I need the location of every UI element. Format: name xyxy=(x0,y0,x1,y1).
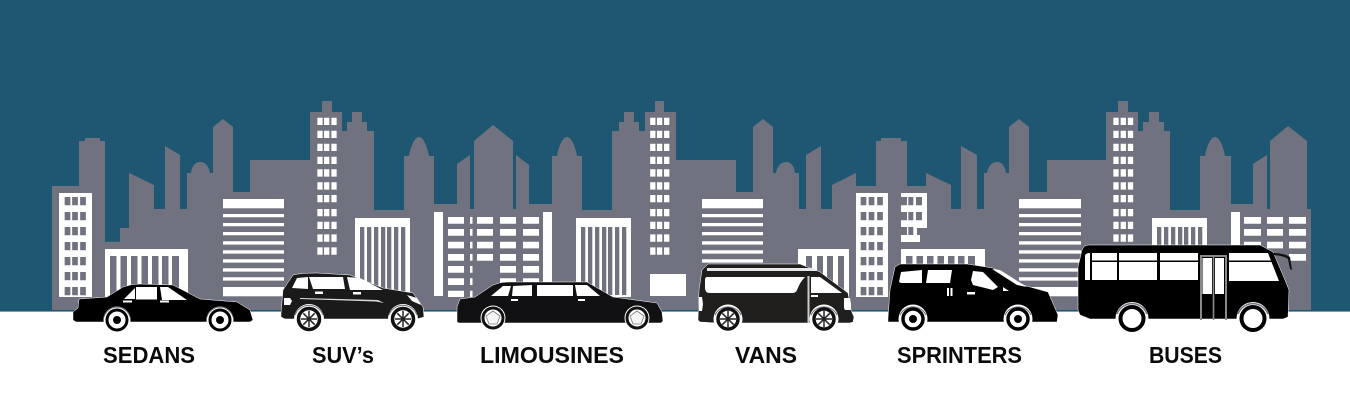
partial window block xyxy=(901,193,927,242)
label: sprinters: SPRINTERS xyxy=(897,342,1022,368)
label: buses: BUSES xyxy=(1149,342,1222,368)
label: vans: VANS xyxy=(735,342,797,368)
columned block, left xyxy=(105,249,188,297)
white block under tower 2 xyxy=(650,274,686,296)
label: sedans: SEDANS xyxy=(103,342,195,368)
columned block 5 xyxy=(901,249,985,297)
striped block 1 xyxy=(223,199,284,296)
window tower, left xyxy=(59,193,92,297)
vehicle: bus xyxy=(1078,245,1292,335)
columned block 6 xyxy=(1152,218,1207,258)
vehicle: limousine xyxy=(457,282,663,330)
striped block 2 xyxy=(702,199,763,263)
vehicle: SUV xyxy=(281,273,424,334)
columned block 4 xyxy=(798,249,849,297)
skyline silhouette xyxy=(52,101,1311,310)
columned block 3 xyxy=(576,218,631,297)
striped block 3 xyxy=(1019,199,1081,296)
vehicle: sedan xyxy=(73,284,253,334)
tower windows 3 xyxy=(1116,118,1130,248)
tower windows 1 xyxy=(320,118,334,260)
sky background xyxy=(0,0,1350,312)
city skyline xyxy=(52,101,1311,310)
white ground xyxy=(0,312,1350,410)
windowed block, right xyxy=(1231,212,1306,261)
columned block 2 xyxy=(355,218,410,297)
vehicle: sprinter xyxy=(888,264,1058,334)
windowed block, centre left xyxy=(434,212,552,297)
label: limousines: LIMOUSINES xyxy=(480,342,624,368)
label: SUVs: SUV’s xyxy=(312,342,374,368)
vehicle: van xyxy=(698,264,854,334)
tower windows 2 xyxy=(653,118,667,260)
window tower, centre xyxy=(856,193,888,297)
